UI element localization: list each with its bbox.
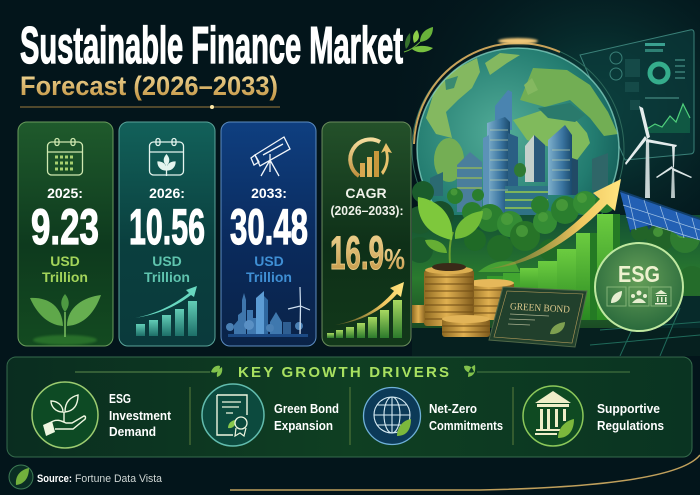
card: 2026: USD bbox=[152, 253, 182, 269]
icon: calendar bbox=[48, 138, 82, 175]
golden growth arrow bbox=[487, 179, 621, 269]
dashboard panel bbox=[580, 30, 694, 160]
card: 2033: 2033: bbox=[251, 185, 287, 201]
card: 2025: 2025: bbox=[47, 185, 83, 201]
driver: ESG investment demand bbox=[32, 382, 172, 448]
ESG glass badge: ESG bbox=[618, 261, 660, 287]
panel: key growth drivers bbox=[7, 357, 692, 457]
ESG glass badge bbox=[595, 243, 683, 331]
source line bbox=[9, 465, 163, 489]
driver: supportive regulations bbox=[523, 386, 664, 446]
landscape with trees bbox=[406, 181, 700, 356]
solar panels bbox=[620, 192, 700, 240]
heading: key growth drivers bbox=[75, 364, 630, 381]
card: 2026: Trillion bbox=[144, 269, 190, 285]
card: 2026: 2026: bbox=[149, 185, 185, 201]
card: 2025: USD bbox=[50, 253, 80, 269]
card: 2033: Trillion bbox=[246, 269, 292, 285]
driver: supportive regulations: Regulations bbox=[597, 418, 664, 433]
driver: ESG investment demand: Demand bbox=[109, 424, 156, 439]
CAGR value: 16.9 bbox=[330, 226, 384, 279]
illustration: sustainable finance scene bbox=[406, 30, 700, 356]
card: 2033: 30.48 bbox=[230, 199, 308, 255]
card: 2026: 10.56 bbox=[129, 199, 205, 255]
icon: telescope bbox=[251, 137, 290, 176]
heading: key growth drivers: KEY GROWTH DRIVERS bbox=[238, 364, 449, 381]
title: Sustainable Finance Market bbox=[20, 17, 403, 75]
icon: title leaf bbox=[404, 27, 433, 52]
icon: gold CAGR gauge bbox=[350, 139, 392, 177]
card: CAGR: (2026–2033): bbox=[330, 204, 404, 218]
driver: net-zero commitments: Net-Zero bbox=[429, 401, 477, 416]
source line: Fortune Data Vista bbox=[75, 473, 163, 485]
driver: green bond expansion: Green Bond bbox=[274, 401, 339, 416]
driver: ESG investment demand: ESG bbox=[109, 391, 131, 406]
city buildings bbox=[430, 90, 608, 220]
driver: net-zero commitments: Commitments bbox=[429, 418, 503, 433]
green bond card: GREEN BOND bbox=[510, 301, 570, 316]
card: 2033: USD bbox=[254, 253, 284, 269]
bar chart with gold arrow bbox=[327, 282, 404, 338]
source line: Source: bbox=[37, 473, 72, 485]
footer gold curve bbox=[230, 455, 700, 490]
subtitle: Forecast (2026–2033) bbox=[20, 71, 278, 101]
icon: sprout leaves bbox=[30, 294, 101, 345]
wind turbines bbox=[625, 106, 692, 198]
card: 2026 bbox=[119, 122, 215, 346]
driver: supportive regulations: Supportive bbox=[597, 401, 660, 416]
green bond card bbox=[489, 287, 587, 347]
card: CAGR bbox=[322, 122, 411, 346]
bar chart with arrow bbox=[135, 286, 197, 336]
icon: calendar with leaf bbox=[150, 138, 184, 176]
driver: net-zero commitments bbox=[364, 388, 503, 444]
card: 2033 bbox=[221, 122, 316, 346]
driver: ESG investment demand: Investment bbox=[109, 408, 172, 423]
card: CAGR: CAGR bbox=[345, 185, 387, 201]
growth bar chart bbox=[487, 214, 620, 320]
coin stacks and sapling bbox=[412, 197, 514, 337]
icon: city skyline with turbine bbox=[226, 287, 310, 337]
card: 2025: 9.23 bbox=[31, 199, 99, 255]
card: 2025 bbox=[18, 122, 113, 346]
driver: green bond expansion: Expansion bbox=[274, 418, 333, 433]
driver: green bond expansion bbox=[202, 384, 339, 446]
globe bbox=[412, 36, 624, 215]
card: 2025: Trillion bbox=[42, 269, 88, 285]
CAGR value: % bbox=[384, 244, 405, 276]
icon: source leaf bbox=[9, 465, 33, 489]
